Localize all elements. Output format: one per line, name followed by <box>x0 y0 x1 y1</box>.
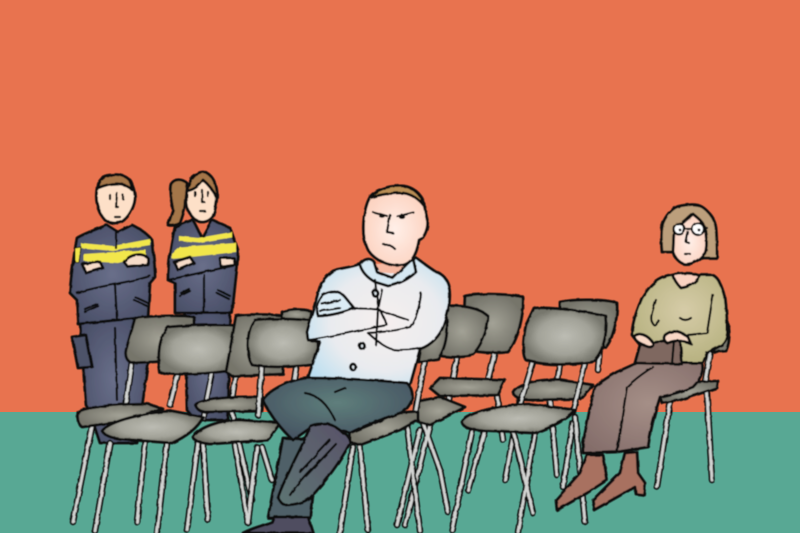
female police officer <box>168 172 238 420</box>
illustration scene <box>70 172 729 533</box>
woman's chair <box>657 315 729 487</box>
male police officer <box>70 175 155 443</box>
woman: right shoe <box>593 452 645 510</box>
woman: hands <box>634 334 653 347</box>
man: raised shoe <box>278 424 350 505</box>
chair behind officers, left <box>73 316 195 522</box>
man: neck and collar <box>360 258 416 286</box>
background wall <box>0 0 800 412</box>
woman: trousers <box>583 363 703 453</box>
woman: handbag <box>635 338 682 364</box>
chair behind right <box>505 300 617 487</box>
chair behind, centre <box>196 310 311 500</box>
chair front left <box>95 325 238 533</box>
woman: face <box>673 214 706 264</box>
woman with handbag <box>556 205 727 510</box>
man: lower shoe <box>243 517 313 533</box>
man: lower leg <box>268 438 318 518</box>
man: face <box>373 212 413 249</box>
woman: sweater <box>632 275 727 363</box>
chair row behind man, right side <box>405 294 523 525</box>
floor <box>0 412 800 533</box>
woman: hair <box>661 205 717 258</box>
man: hand <box>317 292 354 316</box>
man: shirt <box>307 258 450 385</box>
man: head <box>363 186 428 265</box>
chair centre left <box>187 319 318 530</box>
woman: left shoe <box>556 455 607 510</box>
woman: glasses <box>685 228 707 254</box>
chair front right <box>452 308 606 532</box>
man with crossed arms <box>243 186 450 533</box>
man: hair <box>370 186 425 207</box>
man's chair <box>340 306 447 533</box>
man: trousers <box>263 378 412 440</box>
